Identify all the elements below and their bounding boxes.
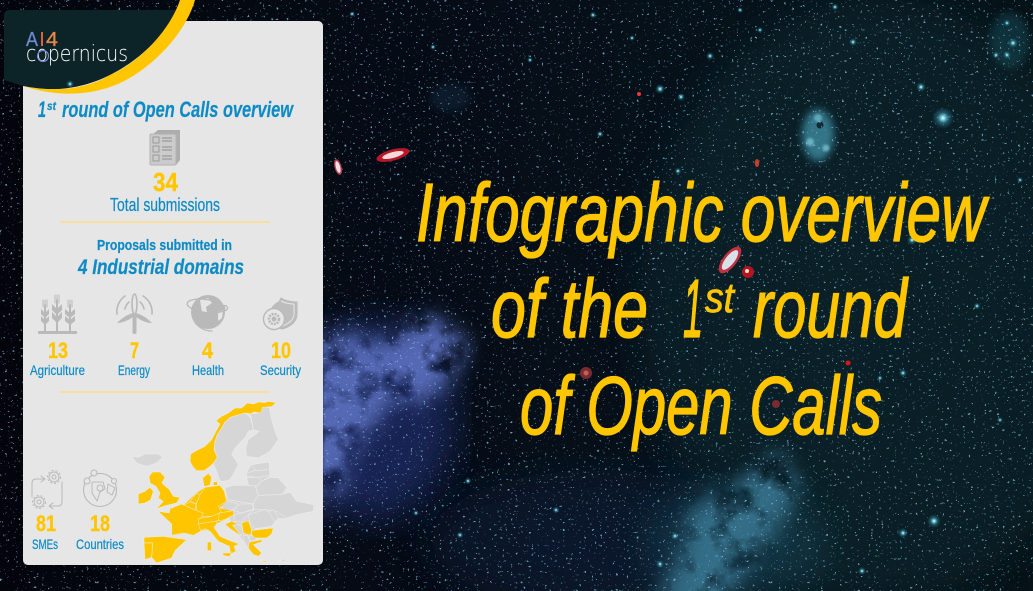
icon: wind turbine	[117, 294, 152, 334]
countries stat	[76, 511, 124, 552]
icon: checklist document	[150, 130, 180, 165]
panel heading: st	[47, 99, 57, 113]
logo: AI4 copernicus	[26, 29, 128, 67]
main title: of Open Calls	[520, 359, 882, 452]
health stat: Health	[192, 362, 224, 378]
health stat: 4	[202, 338, 214, 363]
main title	[416, 166, 990, 452]
icon: security shield	[264, 298, 297, 330]
main title: of the	[491, 262, 648, 355]
total submissions label: Total submissions	[110, 195, 220, 215]
panel heading: 1	[38, 97, 46, 122]
energy stat	[118, 338, 150, 378]
domains heading: 4 Industrial domains	[77, 256, 244, 279]
icon: globe with pins	[84, 470, 116, 506]
panel: open calls overview	[4, 0, 323, 565]
blue nebula	[285, 310, 470, 520]
teal nebula	[645, 450, 825, 591]
logo: AI4 copernicus: copernicus	[26, 42, 128, 67]
health stat	[192, 338, 224, 378]
security stat: Security	[260, 362, 301, 378]
icon: wheat	[38, 295, 77, 334]
panel heading: round of Open Calls overview	[62, 97, 294, 122]
energy stat: Energy	[118, 362, 150, 378]
SMEs stat: 81	[36, 511, 56, 536]
participating countries	[138, 401, 276, 563]
SMEs stat	[32, 511, 58, 552]
security stat: 10	[271, 338, 291, 363]
top right nebula	[430, 12, 1030, 161]
security stat	[260, 338, 301, 378]
logo badge	[4, 0, 195, 94]
domains subheading: Proposals submitted in	[97, 237, 232, 254]
logo: AI4 copernicus: A	[26, 29, 39, 51]
main title: 1	[683, 262, 703, 355]
agriculture stat: 13	[48, 338, 68, 363]
icon: SMEs cycle gears	[32, 470, 62, 509]
countries stat: Countries	[76, 536, 124, 552]
icon: globe	[186, 295, 228, 331]
agriculture stat	[30, 338, 85, 378]
map of Europe	[132, 401, 314, 563]
SMEs stat: SMEs	[32, 536, 58, 552]
total submissions number: 34	[153, 167, 178, 197]
non participating countries	[132, 406, 314, 562]
main title: st	[705, 274, 736, 321]
logo: AI4 copernicus: 4	[46, 29, 58, 51]
panel heading	[38, 97, 294, 122]
galaxies	[333, 92, 850, 408]
bright stars	[349, 4, 1023, 575]
agriculture stat: Agriculture	[30, 362, 85, 378]
yellow arc	[23, 0, 195, 94]
energy stat: 7	[130, 338, 139, 363]
countries stat: 18	[90, 511, 110, 536]
main title: round	[753, 262, 909, 355]
